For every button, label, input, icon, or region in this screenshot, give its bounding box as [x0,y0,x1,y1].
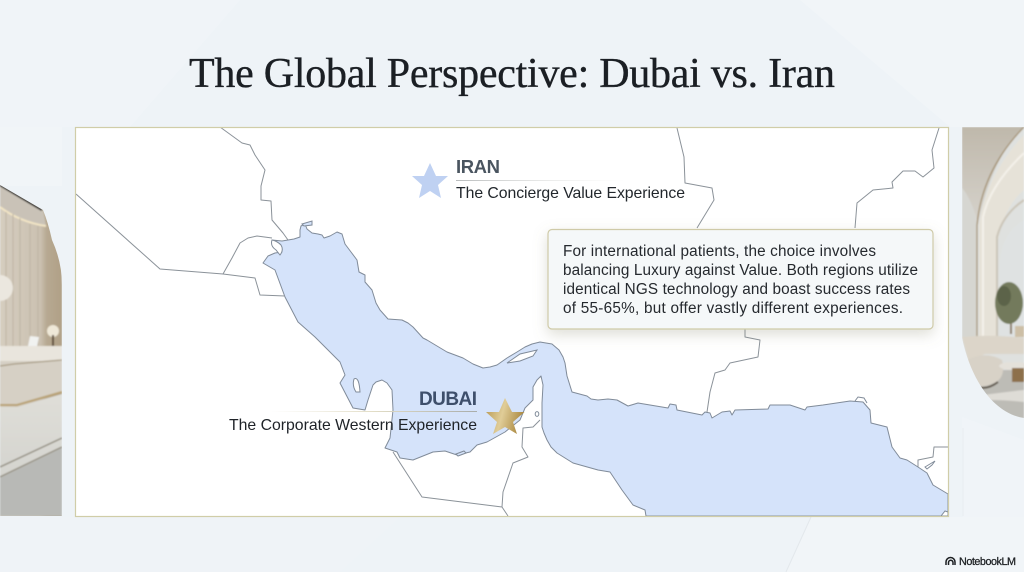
panel: map [76,127,948,516]
title: The Global Perspective: Dubai vs. Iran [189,51,835,97]
NotebookLM logo: NotebookLM [959,556,1016,568]
land borders [76,127,948,516]
callout: For international patients, the choice involves [563,243,876,260]
islands [272,221,948,516]
label: Iran [456,156,685,202]
left lobby photo [0,180,62,520]
label: Dubai: The Corporate Western Experience [229,417,477,434]
label: Iran: IRAN [456,156,500,177]
right lounge photo [962,127,1024,422]
icon: Dubai star [486,398,524,434]
gulf water [263,224,948,516]
icon: NotebookLM [946,558,955,565]
label: Iran: The Concierge Value Experience [456,185,685,202]
map: borders and sea [76,127,948,516]
callout: identical NGS technology and boast success rates [563,281,910,298]
callout [548,230,933,329]
icon: Iran star [412,163,448,198]
callout: balancing Luxury against Value. Both regions utilize [563,262,918,279]
label: Dubai [229,389,477,434]
callout: of 55-65%, but offer vastly different experiences. [563,300,903,317]
label: Dubai: DUBAI [419,389,477,410]
